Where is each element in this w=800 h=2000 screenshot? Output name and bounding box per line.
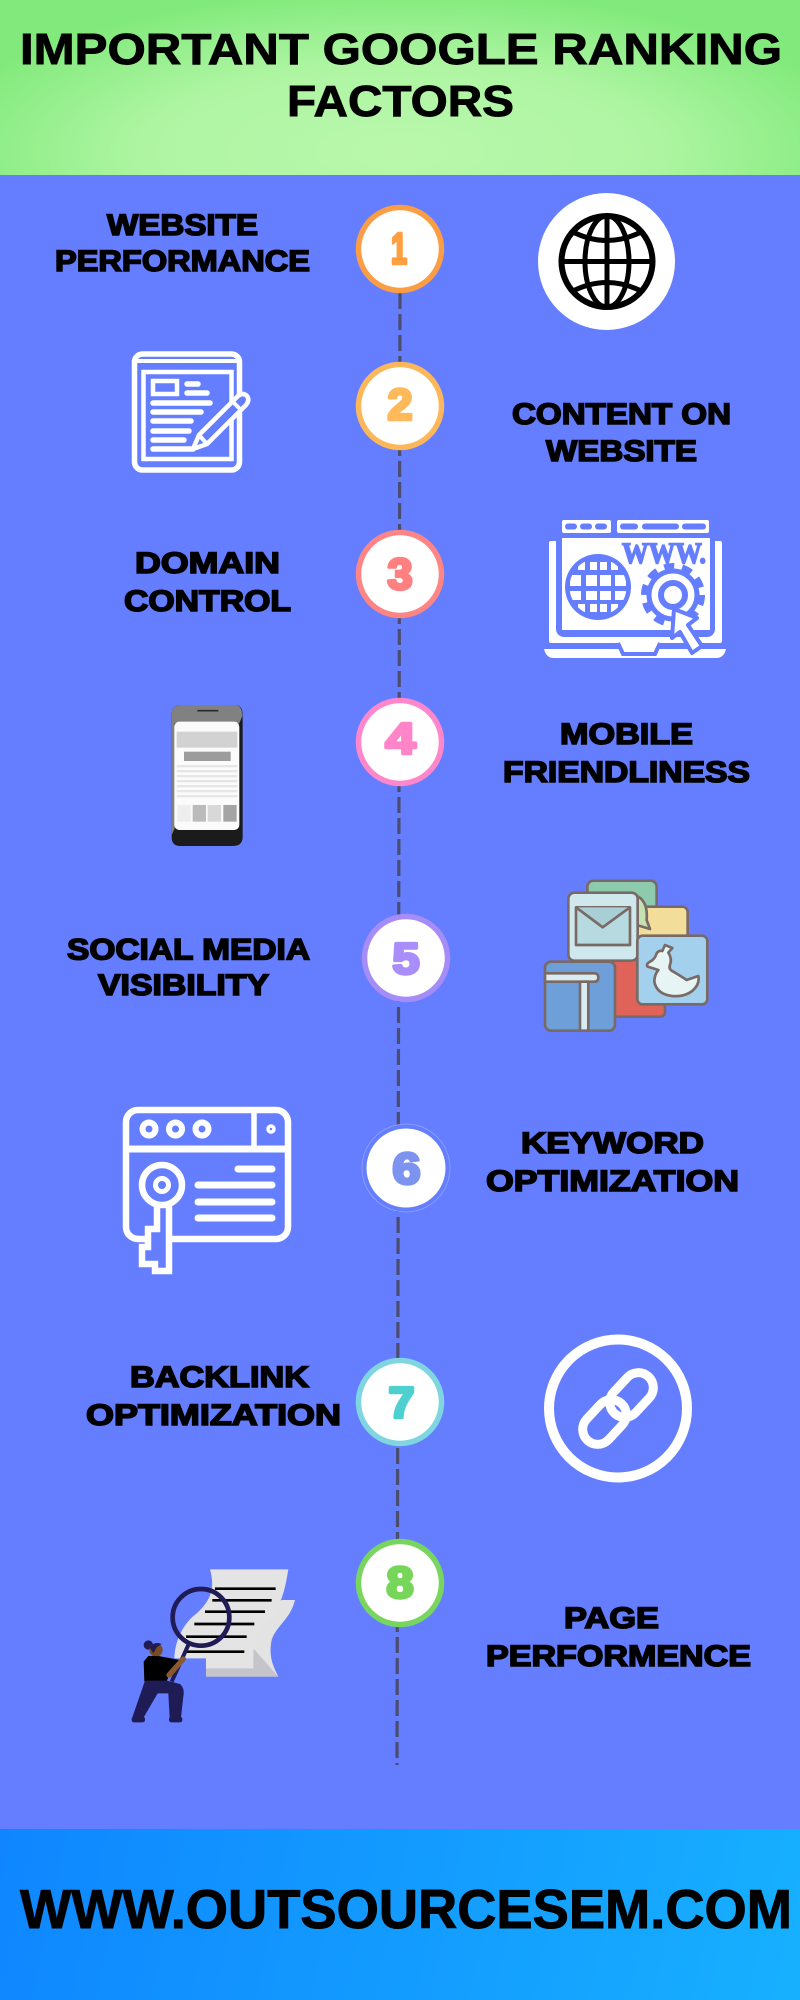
title: FACTORS [287,77,514,126]
step 1 number: 1 [391,224,407,274]
step 1 number [358,208,442,290]
step 4 number [358,700,442,784]
icon: social media cards [545,881,707,1031]
step 3 number [358,532,442,616]
step 4 label [503,718,750,789]
footer banner [0,1829,800,2000]
step 8 label [486,1602,751,1673]
icon: laptop with www, globe and gear: WWW. [622,537,706,570]
icon: document with pencil [134,354,248,470]
step 7 number: 7 [388,1378,414,1428]
icon: browser window with key [126,1110,288,1271]
step 2 label: CONTENT ON [512,398,731,431]
step 3 label: CONTROL [124,585,291,618]
step 2 number: 2 [388,380,412,430]
step 5 number [364,916,448,1000]
step 8 label: PAGE [564,1602,659,1635]
icon: chain link in ring [549,1340,687,1478]
step 6 label: KEYWORD [521,1127,704,1160]
step 7 label: BACKLINK [130,1361,309,1394]
icon: laptop with www, globe and gear [544,520,726,658]
header banner [0,0,800,175]
step 6 label [486,1127,739,1198]
step 3 label: DOMAIN [135,547,280,580]
step 5 label [67,934,310,1002]
step 7 label [86,1361,341,1432]
step 2 label: WEBSITE [546,435,697,468]
step 8 label: PERFORMENCE [486,1640,751,1673]
step 4 label: FRIENDLINESS [503,756,750,789]
step 2 label [512,398,731,468]
step 3 label [124,547,291,618]
icon: globe in white circle [538,193,675,330]
step 5 label: SOCIAL MEDIA [67,934,310,966]
icon: person with magnifier inspecting page [132,1569,295,1722]
step 4 label: MOBILE [560,718,693,751]
step 7 number [358,1360,442,1444]
dashed timeline [397,293,400,1765]
step 3 number: 3 [388,550,412,599]
step 4 number: 4 [386,714,416,764]
step 5 number: 5 [392,934,420,984]
step 8 number [358,1542,442,1624]
step 2 number [358,364,442,448]
step 1 label [55,209,310,278]
step 8 number: 8 [386,1558,414,1608]
icon: smartphone [172,705,243,846]
website url: WWW.OUTSOURCESEM.COM [20,1878,792,1940]
step 6 label: OPTIMIZATION [486,1165,739,1198]
step 7 label: OPTIMIZATION [86,1399,341,1432]
step 6 number: 6 [392,1144,420,1194]
step 5 label: VISIBILITY [98,969,269,1002]
step 6 number [362,1124,450,1212]
title: IMPORTANT GOOGLE RANKING [20,25,782,74]
title [20,25,782,126]
step 1 label: WEBSITE [107,209,258,242]
step 1 label: PERFORMANCE [55,245,310,278]
